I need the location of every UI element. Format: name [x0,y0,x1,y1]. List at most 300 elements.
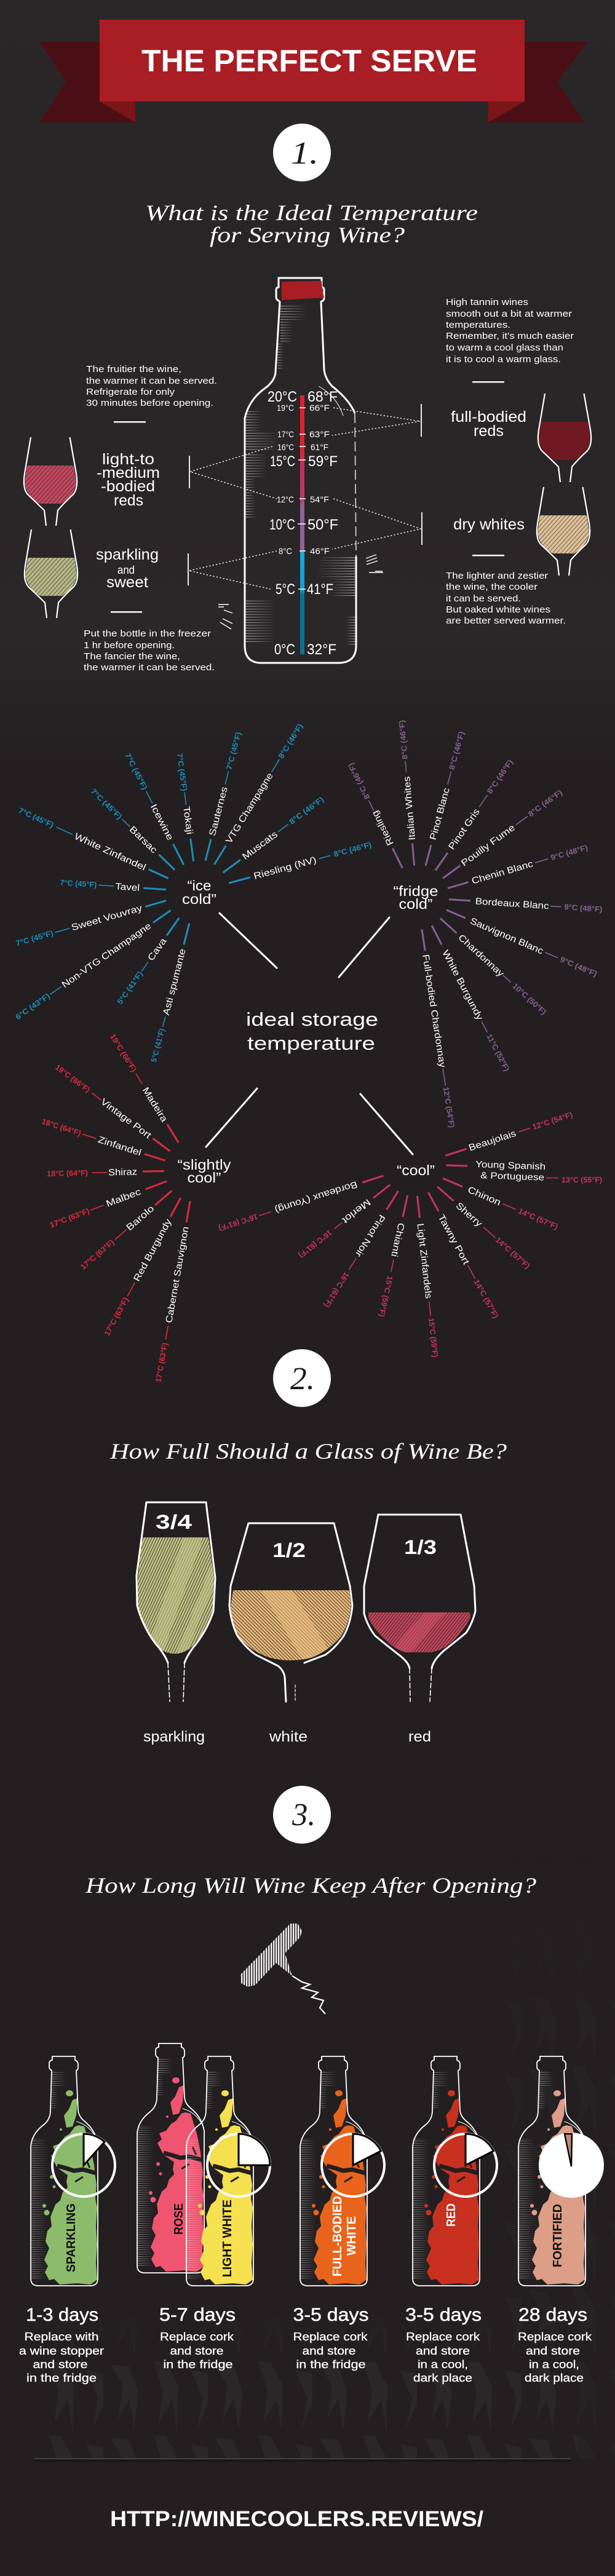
note: fruitier [86,364,217,422]
section number 3: 3. [292,1797,315,1833]
spoke: Beaujolais [444,1110,574,1161]
fraction: 1/2 [272,1539,306,1561]
spoke: Chianti: Chianti [389,1222,407,1258]
note: fruitier: the warmer it can be served. [86,376,217,386]
pie: 3-5 days [434,2134,497,2197]
spoke: Full-bodied Chardonnay: Full-bodied Chardonnay [420,954,448,1069]
note: high tannin: it is to cool a warm glass. [446,354,561,365]
label: SPARKLING [65,2203,78,2272]
label: light-to-medium-bodied reds: -bodied [101,478,155,495]
spoke: Cava [115,915,184,1007]
bottle: fortified [518,2056,604,2384]
radial chart: fridge cold [346,719,603,1128]
spoke: Pouilly Fume: 8°C (46°F) [526,788,564,818]
note: freezer: The fancier the wine, [84,651,180,662]
label: light-to-medium-bodied reds: light-to [102,451,154,468]
wine fill [231,1590,351,1660]
label: sparkling and sweet: sweet [106,574,148,591]
spoke: Red Burgundy [102,1195,186,1338]
wine fill [368,1612,470,1652]
fraction: 1/3 [404,1536,437,1558]
spoke: Merlot: Merlot [339,1197,373,1226]
spoke: Chenin Blanc: 9°C (48°F) [550,843,589,862]
spoke: Riesling (NV): Riesling (NV) [253,855,317,882]
wine fill [138,1537,214,1654]
spoke: Tawny Port: Tawny Port [436,1213,472,1267]
spoke: Sauvignon Blanc [444,905,598,980]
spoke: Malbec: Malbec [105,1186,143,1209]
spoke: Muscats [220,795,326,877]
duration and instructions [293,2305,369,2371]
spoke: Pinot Blanc: Pinot Blanc [428,787,452,841]
temperature labels: 0°C [274,641,295,658]
label: sparkling and sweet [96,546,159,591]
heading: ideal temperature [145,200,478,247]
spoke: Malbec: 17°C (63°F) [49,1207,91,1229]
spoke: Sherry: Sherry [454,1200,484,1229]
temperature labels: 68°F [308,389,338,405]
spoke: Zinfandel: Zinfandel [97,1135,143,1158]
spoke: Malbec [49,1176,169,1231]
banner tails [39,42,135,122]
duration and instructions: Replace cork [406,2331,480,2343]
spoke: Pinot Gris [432,758,516,873]
spoke: Riesling (NV) [228,839,373,889]
spoke: Bordeaux Blanc [448,894,603,915]
hub label: cold” [399,896,433,912]
hub label [182,878,216,907]
spoke: Beaujolais: 12°C (54°F) [531,1111,574,1131]
heading: ideal storage temperature: temperature [247,1032,375,1054]
spoke: Merlot [296,1180,394,1260]
duration and instructions: in a cool, [418,2358,468,2371]
spoke: Chinon: Chinon [466,1184,502,1208]
temperature labels: 66°F [309,403,330,413]
spoke: Sauternes: 7°C (45°F) [225,731,243,771]
paint [198,2090,253,2285]
banner body [100,20,525,101]
note: fruitier: The fruitier the wine, [86,364,181,375]
label: full-bodied reds: full-bodied [451,408,526,426]
glass: red 1/3 [364,1515,475,1745]
spoke: White Zinfandel: White Zinfandel [73,831,148,873]
duration and instructions: Replace with [25,2331,98,2343]
spoke: Merlot: 16°C (61°F) [297,1228,333,1259]
heading: how long: How Long Will Wine Keep After Opening? [85,1873,536,1898]
label: LIGHT WHITE [221,2200,234,2277]
duration and instructions: in a cool, [529,2358,579,2371]
spoke: Pouilly Fume: Pouilly Fume [459,822,517,869]
spoke: Young Spanish and Portuguese: Young Spanish [475,1159,546,1172]
duration and instructions: 3-5 days [405,2305,482,2325]
outline [518,2056,585,2286]
label: light-to-medium-bodied reds: reds [114,492,143,509]
section number 2: 2. [290,1361,315,1397]
note: freezer: Put the bottle in the freezer [84,628,211,639]
spoke: Sweet Vouvray [15,896,168,949]
outline [413,2056,480,2286]
heading: ideal temperature: for Serving Wine? [210,223,405,247]
note: high tannin: smooth out a bit at warmer [446,309,572,319]
spoke: VTG Champagne: VTG Champagne [224,771,276,846]
spoke: Bordeaux (Young): Bordeaux (Young) [274,1179,359,1215]
label: RED [445,2203,458,2227]
spoke: Shiraz: 18°C (64°F) [47,1168,88,1178]
heading: how full: How Full Should a Glass of Wine Be? [109,1439,507,1464]
spoke: Zinfandel [41,1117,167,1166]
duration and instructions: and store [33,2358,87,2371]
icon: white glass [537,487,590,576]
panel: sparkling and sweet [25,529,215,673]
temperature labels: 46°F [310,546,330,556]
temperature labels [268,389,338,658]
bottle hatching [246,304,355,646]
temperature labels: 63°F [309,429,330,439]
note: lighter and zestier: the wine, the cooler [446,582,538,592]
spoke: Chinon [440,1174,560,1232]
spoke: Barolo: 17°C (63°F) [79,1238,116,1271]
bottle: sparkling [19,2056,115,2384]
hub label: cold” [182,891,216,907]
spoke: Pouilly Fume [440,788,565,883]
spoke: VTG Champagne: 8°C (46°F) [277,722,305,760]
spoke: Sauternes: Sauternes [207,786,230,837]
glass: white 1/2 [228,1523,354,1745]
duration and instructions: and store [170,2345,224,2357]
spoke: Riesling [346,761,407,870]
spoke: Sherry [434,1183,532,1271]
spoke: Tawny Port [423,1190,501,1320]
duration and instructions [518,2305,592,2384]
hub label [394,883,438,912]
label: WHITE [345,2216,359,2256]
icon: sparkling glass [25,529,77,618]
note: high tannin: temperatures. [446,320,510,330]
spoke: Chianti: 15°C (59°F) [377,1275,394,1318]
spoke: White Zinfandel [17,806,170,884]
temperature labels: 41°F [307,581,333,598]
spoke: Sauvignon Blanc: 9°C (48°F) [559,955,598,978]
note: lighter and zestier: But oaked white wines [446,604,550,615]
spoke: Pinot Gris: 8°C (46°F) [485,758,515,795]
panel: light-to-medium-bodied reds [24,364,217,526]
spoke: Chenin Blanc [446,842,589,894]
pie: 3-5 days [322,2134,384,2197]
temperature labels: 8°C [279,546,292,556]
dotted connector lines [188,404,422,589]
note: freezer: 1 hr before opening. [84,640,175,651]
radial chart: cool [217,1110,602,1358]
heading: ideal storage temperature [206,913,413,1154]
spoke: White Zinfandel: 7°C (45°F) [17,806,55,830]
duration and instructions: and store [416,2345,470,2357]
title banner [39,20,587,122]
spoke: Pinot Blanc [421,731,467,867]
temperature labels: 16°C [277,442,294,452]
spoke: Cava: Cava [146,936,169,963]
spoke: Non-VTG Champagne: Non-VTG Champagne [60,921,153,990]
spoke: Tokaji: Tokaji [181,806,195,835]
label [331,2196,359,2277]
spoke: Vintage Port [53,1062,173,1155]
spoke: Asti spumante: 5°C (41°F) [149,1028,167,1063]
thermometer scale [300,395,304,654]
spoke: Cabernet Sauvignon: Cabernet Sauvignon [164,1226,191,1324]
radial chart: ice cold [14,722,373,1063]
spoke: Madeira: Madeira [140,1085,170,1124]
chalk marks [218,555,383,629]
duration and instructions [19,2305,104,2384]
spoke: Cabernet Sauvignon: 17°C (63°F) [154,1342,169,1383]
spoke: Vintage Port: 19°C (66°F) [54,1063,92,1095]
spoke: Chenin Blanc: Chenin Blanc [470,858,534,887]
temperature labels: 17°C [277,429,294,439]
spoke: Pinot Noir: 16°C (61°F) [322,1270,351,1309]
background texture: chalk shards [34,1857,615,2462]
spoke: VTG Champagne [210,722,306,868]
spoke: White Burgundy [427,923,512,1073]
spoke: Full-bodied Chardonnay [416,929,457,1128]
spoke: Young Spanish and Portuguese: & Portuguese [480,1170,544,1183]
duration and instructions: Replace cork [518,2331,592,2343]
paint [149,2077,204,2272]
pie: 1-3 days [52,2134,115,2197]
section number 3 [273,1786,331,1844]
duration and instructions: and store [526,2345,580,2357]
hub label: “ice [187,878,212,894]
temperature labels: 54°F [310,494,329,504]
panel: full-bodied reds [446,297,591,482]
spoke: Light Zinfandels: 15°C (59°F) [427,1318,440,1358]
paint [424,2090,479,2285]
spoke: Pinot Blanc: 8°C (46°F) [448,731,466,771]
fraction: 3/4 [156,1511,192,1533]
spoke: Sweet Vouvray: 7°C (45°F) [15,929,54,948]
spoke: Cabernet Sauvignon [153,1200,196,1383]
label: sparkling and sweet: sparkling [96,546,159,563]
label: sparkling [143,1729,205,1745]
spoke: Full-bodied Chardonnay: 12°C (54°F) [442,1086,456,1128]
temperature labels: 15°C [270,453,295,470]
spoke: Bordeaux (Young) [217,1170,385,1233]
spoke: White Burgundy: 11°C (52°F) [485,1032,511,1072]
duration and instructions: in the fridge [296,2358,365,2371]
hub label [177,1157,231,1186]
spoke: Chianti [376,1194,412,1318]
duration and instructions: 3-5 days [293,2305,369,2325]
spoke: Sauvignon Blanc: Sauvignon Blanc [469,916,545,957]
spoke: Sauternes [200,731,244,862]
heading: ideal temperature: What is the Ideal Temperature [145,200,478,225]
spoke: Barsac: 7°C (45°F) [89,787,124,821]
label: FORTIFIED [551,2204,565,2267]
spoke: Tavel: 7°C (45°F) [60,878,97,889]
hub label: “cool” [397,1162,435,1178]
glass outline [229,1523,352,1702]
spoke: Chardonnay: 10°C (50°F) [510,981,548,1017]
spoke: Asti spumante: Asti spumante [161,948,188,1017]
spoke: Riesling (NV): 8°C (46°F) [333,840,373,858]
outline [300,2056,367,2286]
spoke: Barsac [88,787,178,874]
temperature labels: 5°C [276,581,295,598]
note: lighter and zestier: The lighter and zestier [446,571,548,581]
spoke: Tokaji [174,753,198,862]
duration and instructions: dark place [525,2372,584,2384]
spoke: Pinot Gris: Pinot Gris [446,807,482,852]
radial chart: slightly cool [41,1032,231,1383]
section number 1 [273,124,331,181]
spoke: Red Burgundy: 17°C (63°F) [103,1296,130,1338]
bottle: rose [137,2043,236,2371]
spoke: Tokaji: 7°C (45°F) [175,753,189,791]
duration and instructions: 28 days [518,2305,587,2325]
duration and instructions [159,2305,236,2371]
heading: ideal storage temperature: ideal storage [246,1009,378,1030]
duration and instructions: Replace cork [293,2331,368,2343]
spoke: Italian Whites: 8°C (46°F) [397,719,410,759]
label: white [269,1729,308,1745]
label: FULL-BODIED [331,2196,344,2277]
spoke: Tavel: Tavel [115,881,140,894]
bottle: red [405,2056,497,2384]
spoke: Bordeaux Blanc: 9°C (48°F) [564,903,603,914]
spoke: Barsac: Barsac [127,824,159,856]
spoke: Asti spumante [149,922,195,1063]
note: high tannin: High tannin wines [446,297,528,307]
spoke: White Burgundy: White Burgundy [440,948,485,1022]
temperature labels: 10°C [269,517,295,533]
icon: rose glass [24,437,77,526]
spoke: Young Spanish and Portuguese [446,1159,602,1184]
spoke: Young Spanish and Portuguese: 13°C (55°F) [561,1176,602,1184]
label: ROSE [172,2203,186,2235]
spoke: Tawny Port: 14°C (57°F) [472,1278,500,1320]
section number 1: 1. [291,136,319,171]
spoke: Pinot Noir [321,1188,402,1309]
spoke: Sweet Vouvray: Sweet Vouvray [70,903,144,933]
label: red [408,1729,431,1745]
spoke: Shiraz [47,1166,164,1179]
spoke: Sherry: 14°C (57°F) [494,1235,531,1270]
pie: 28 days [539,2133,604,2198]
duration and instructions [405,2305,482,2384]
footer url: HTTP://WINECOOLERS.REVIEWS/ [110,2507,483,2531]
bottle: light white [186,2056,270,2286]
spoke: Icewine [122,751,188,867]
spoke: Pinot Noir: Pinot Noir [353,1213,387,1259]
duration and instructions: dark place [413,2372,472,2384]
note: lighter and zestier [446,555,566,626]
spoke: Beaujolais: Beaujolais [467,1128,517,1154]
spoke: Red Burgundy: Red Burgundy [132,1217,174,1283]
spoke: Riesling: 8°C (46°F) [346,761,371,801]
temperature labels: 20°C [268,389,297,405]
glass outline [137,1502,215,1702]
spoke: Icewine: 7°C (45°F) [123,751,149,791]
note: high tannin: to warm a cool glass than [446,343,563,353]
spoke: Muscats: Muscats [240,829,280,862]
spoke: Barolo [79,1187,175,1272]
spoke: Madeira: 19°C (66°F) [108,1032,138,1074]
spoke: Vintage Port: Vintage Port [98,1096,154,1141]
duration and instructions: 1-3 days [26,2305,98,2325]
label: light-to-medium-bodied reds: -medium [97,464,160,482]
outline [31,2056,98,2286]
note: high tannin [446,297,574,382]
spoke: Madeira [107,1032,183,1146]
hub label: “slightly [177,1157,231,1173]
label: full-bodied reds [451,408,526,440]
spoke: Riesling: Riesling [370,809,396,847]
outline [137,2043,204,2273]
spoke: Italian Whites [397,719,420,866]
temperature labels: 59°F [308,453,338,470]
title: THE PERFECT SERVE [141,44,477,78]
hub label: cool” [187,1170,221,1186]
temperature labels: 19°C [277,403,294,413]
bottle: full-bodied white [293,2056,384,2371]
label: light-to-medium-bodied reds [97,451,160,509]
temperature labels: 32°F [307,641,336,658]
label: sparkling and sweet: and [117,564,135,576]
spoke: Italian Whites: Italian Whites [402,776,418,841]
note: lighter and zestier: it can be served. [446,593,521,604]
duration and instructions: and store [303,2345,355,2357]
temperature labels: 12°C [277,494,294,504]
pie: 5-7 days [207,2134,270,2197]
spoke: Non-VTG Champagne [14,906,174,1023]
note: fruitier: Refrigerate for only [86,387,175,397]
icon: red glass [538,394,591,482]
spoke: Muscats: 8°C (46°F) [288,795,325,826]
glass outline [364,1515,475,1702]
spoke: Zinfandel: 18°C (64°F) [41,1117,82,1138]
duration and instructions: in the fridge [164,2358,232,2371]
duration and instructions: in the fridge [26,2372,97,2384]
spoke: Barolo: Barolo [124,1203,156,1233]
spoke: Chardonnay [437,914,549,1017]
panel: dry whites [446,487,590,626]
note: freezer [84,611,215,673]
outline [186,2056,253,2286]
note: freezer: the warmer it can be served. [84,662,215,673]
spoke: Icewine: Icewine [148,803,175,842]
glass: sparkling 3/4 [135,1502,218,1745]
spoke: Cava: 5°C (41°F) [116,970,145,1006]
icon: corkscrew [240,1924,325,2014]
spoke: Bordeaux Blanc: Bordeaux Blanc [475,896,550,911]
note: lighter and zestier: are better served warmer. [446,616,566,626]
hub label: “fridge [394,883,438,899]
paint [530,2090,585,2285]
thermometer bottle [218,278,383,663]
bottle outline [245,278,356,663]
spoke: Non-VTG Champagne: 6°C (43°F) [14,991,52,1021]
spoke: Light Zinfandels [412,1195,440,1358]
note: fruitier: 30 minutes before opening. [86,398,213,408]
paint [42,2090,97,2285]
cork [282,281,324,300]
temperature labels: 50°F [308,517,338,533]
note: high tannin: Remember, it's much easier [446,331,574,341]
spoke: Shiraz: Shiraz [108,1167,137,1178]
spoke: Light Zinfandels: Light Zinfandels [415,1223,434,1299]
duration and instructions: 5-7 days [159,2305,236,2325]
label: dry whites: dry whites [453,516,525,533]
spoke: Chardonnay: Chardonnay [456,932,506,979]
label: full-bodied reds: reds [474,422,504,440]
